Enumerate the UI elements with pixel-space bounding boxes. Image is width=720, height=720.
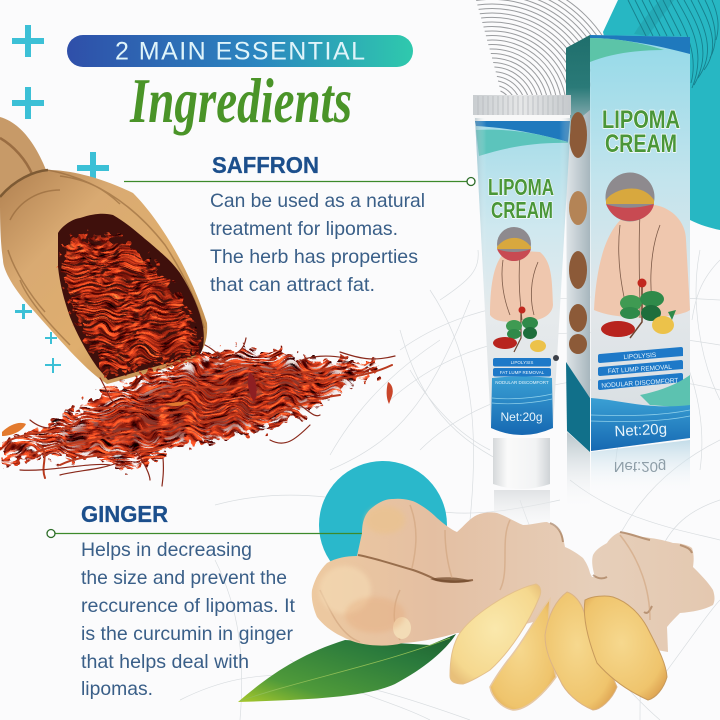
- saffron petals: [2, 372, 393, 436]
- ginger connector line: [47, 530, 362, 538]
- box label bars: LIPOLYSIS: [623, 352, 657, 361]
- box reflection: [567, 432, 690, 510]
- box product name: [602, 106, 680, 158]
- ginger heading and text: [81, 501, 296, 700]
- box bottom wave: [591, 375, 690, 451]
- ginger root: [312, 499, 714, 652]
- teal corner shape: [603, 0, 720, 230]
- tube body: [475, 118, 571, 435]
- saffron pile: [2, 338, 395, 486]
- scoop interior: [58, 214, 204, 380]
- tube bottom wave: [491, 376, 553, 435]
- saffron in scoop: [62, 235, 198, 376]
- box product name: CREAM: [605, 130, 677, 158]
- tube base reflection: [494, 490, 550, 538]
- ginger slices: [450, 584, 667, 710]
- hatched wave lines: [476, 0, 625, 110]
- saffron heading and text: SAFFRON: [212, 152, 319, 178]
- product box: [566, 35, 690, 510]
- saffron heading and text: treatment for lipomas.: [210, 218, 398, 240]
- ginger heading and text: Helps in decreasing: [81, 539, 252, 561]
- box label bars: FAT LUMP REMOVAL: [608, 364, 673, 375]
- box plant: [601, 278, 676, 338]
- tube top wave: [475, 121, 570, 142]
- ginger heading and text: that helps deal with: [81, 651, 249, 673]
- background line pattern: [180, 250, 720, 720]
- box bottom wave: Net:20g: [614, 421, 667, 440]
- leaf: [238, 634, 456, 702]
- tube base: [493, 438, 550, 489]
- box back figure: [594, 205, 690, 318]
- tube side dot: [553, 355, 559, 361]
- saffron connector line: [124, 178, 475, 186]
- saffron threads: [10, 338, 395, 486]
- title script: Ingredients: Ingredients: [129, 65, 352, 136]
- tube lipoma circle: [497, 227, 531, 261]
- ginger heading and text: lipomas.: [81, 678, 153, 700]
- box lipoma circle: [606, 172, 654, 222]
- product tube: [473, 95, 571, 538]
- saffron heading and text: [210, 152, 425, 296]
- ginger heading and text: is the curcumin in ginger: [81, 623, 293, 645]
- saffron heading and text: The herb has properties: [210, 246, 418, 268]
- tube bottom wave: Net:20g: [500, 410, 543, 424]
- tube back figure: [490, 250, 553, 322]
- tube shading: [475, 118, 571, 435]
- tube label bars: NODULAR DISCOMFORT: [495, 380, 549, 385]
- tube label bars: LIPOLYSIS: [511, 360, 533, 365]
- plus signs: [12, 25, 109, 373]
- ginger heading and text: GINGER: [81, 501, 168, 527]
- title pill: 2 Main Essential: [67, 35, 413, 67]
- box side: [566, 35, 590, 452]
- box front: [590, 35, 690, 451]
- box product name: LIPOMA: [602, 106, 680, 134]
- saffron heading and text: that can attract fat.: [210, 274, 375, 296]
- ginger heading and text: reccurence of lipomas. It: [81, 595, 296, 617]
- tube product name: LIPOMA: [488, 174, 554, 200]
- ginger heading and text: the size and prevent the: [81, 567, 287, 589]
- tube label bars: FAT LUMP REMOVAL: [500, 370, 545, 375]
- teal circle behind ginger: [319, 461, 447, 589]
- title pill: 2 Main Essential: 2 MAIN ESSENTIAL: [115, 38, 365, 66]
- tube label bars: [493, 358, 551, 385]
- tube product name: CREAM: [491, 197, 553, 223]
- box label bars: [598, 347, 683, 390]
- tube cap: [473, 95, 571, 121]
- tube plant: [493, 306, 546, 352]
- wooden scoop with saffron: [0, 117, 207, 384]
- saffron heading and text: Can be used as a natural: [210, 190, 425, 212]
- box label bars: NODULAR DISCOMFORT: [601, 377, 679, 390]
- ginger with leaf and slices: [238, 499, 714, 710]
- box reflection: Net:20g: [614, 458, 666, 475]
- tube product name: [488, 174, 554, 223]
